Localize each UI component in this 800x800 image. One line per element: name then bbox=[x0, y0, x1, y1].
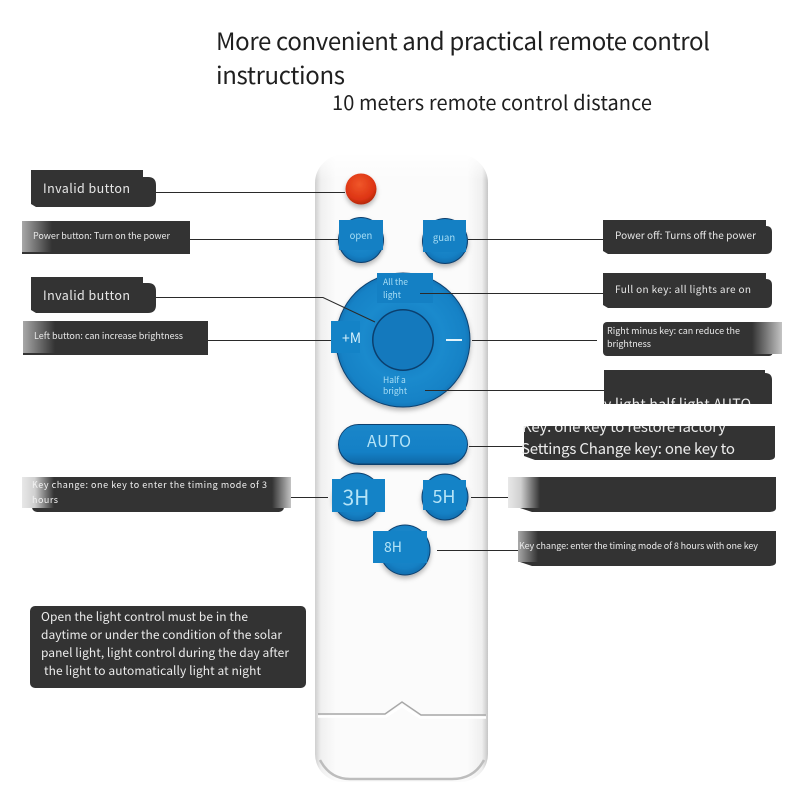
callout: 3 hour key bbox=[22, 477, 291, 512]
circular control pad: Half a bbox=[383, 374, 406, 386]
callout: half light key bbox=[604, 370, 772, 404]
callout: invalid button top: Invalid button bbox=[43, 178, 130, 197]
subtitle: remote distance: 10 meters remote control distance bbox=[332, 87, 652, 116]
guan button bbox=[422, 218, 468, 264]
open button: open bbox=[350, 228, 372, 242]
callout: left button bbox=[23, 321, 208, 355]
AUTO button bbox=[338, 424, 468, 465]
callout: power off: Power off: Turns off the power bbox=[615, 227, 756, 242]
red invalid button bbox=[346, 174, 376, 204]
callout: solar panel note bbox=[30, 606, 306, 688]
5H button bbox=[422, 474, 468, 520]
title bbox=[216, 22, 710, 91]
circular control pad: bright bbox=[383, 385, 408, 397]
leader lines bbox=[156, 192, 604, 550]
callout: invalid button center bbox=[31, 277, 156, 313]
callout: AUTO key: Settings Change key: one key to bbox=[521, 438, 735, 459]
title: More convenient and practical remote control bbox=[216, 22, 710, 57]
3H button bbox=[332, 472, 385, 522]
callout: left button: Left button: can increase brightness bbox=[34, 329, 183, 342]
remote control body bbox=[315, 155, 488, 782]
callout: solar panel note: daytime or under the condition of the solar bbox=[41, 626, 282, 643]
open button bbox=[338, 217, 384, 263]
callout: right minus key bbox=[603, 322, 782, 356]
circular control pad: All the bbox=[383, 276, 408, 288]
callout: solar panel note: panel light, light control during the day after bbox=[41, 644, 289, 661]
callout: full on key bbox=[603, 273, 772, 308]
callout: power off bbox=[603, 220, 772, 254]
AUTO button: AUTO bbox=[367, 428, 411, 452]
callout: AUTO key bbox=[522, 426, 775, 460]
8H button bbox=[373, 524, 430, 576]
callout: solar panel note: Open the light control must be in the bbox=[41, 608, 248, 625]
callout: AUTO key: Key: one key to restore factory bbox=[522, 416, 726, 437]
callout: solar panel note: the light to automatically light at night bbox=[44, 662, 261, 679]
callout: right minus key: Right minus key: can reduce the bbox=[607, 324, 740, 337]
circular control pad bbox=[331, 272, 470, 408]
title: instructions bbox=[216, 56, 345, 91]
callout: 3 hour key: hours bbox=[32, 493, 58, 506]
callout: 5 hour key bbox=[508, 477, 776, 512]
5H button: 5H bbox=[432, 483, 456, 509]
circular control pad: light bbox=[383, 289, 402, 301]
callout: 8 hour key: Key change: enter the timing mode of 8 hours with one key bbox=[519, 539, 758, 552]
callout: invalid button top bbox=[31, 170, 156, 207]
3H button: 3H bbox=[343, 482, 369, 512]
callout: 5 hour key: g bbox=[618, 457, 627, 478]
callout: full on key: Full on key: all lights are on bbox=[615, 281, 751, 296]
circular control pad: +M bbox=[342, 328, 361, 348]
callout: 8 hour key bbox=[518, 531, 776, 566]
callout: power button bbox=[22, 221, 190, 254]
callout: 3 hour key: Key change: one key to enter the timing mode of 3 bbox=[32, 478, 267, 491]
8H button: 8H bbox=[384, 537, 402, 557]
guan button: guan bbox=[433, 230, 455, 244]
callout: half light key: y light half light AUTO bbox=[604, 394, 751, 414]
callout: invalid button center: Invalid button bbox=[43, 285, 130, 304]
callout: power button: Power button: Turn on the power bbox=[33, 229, 170, 242]
callout: right minus key: brightness bbox=[607, 337, 651, 350]
